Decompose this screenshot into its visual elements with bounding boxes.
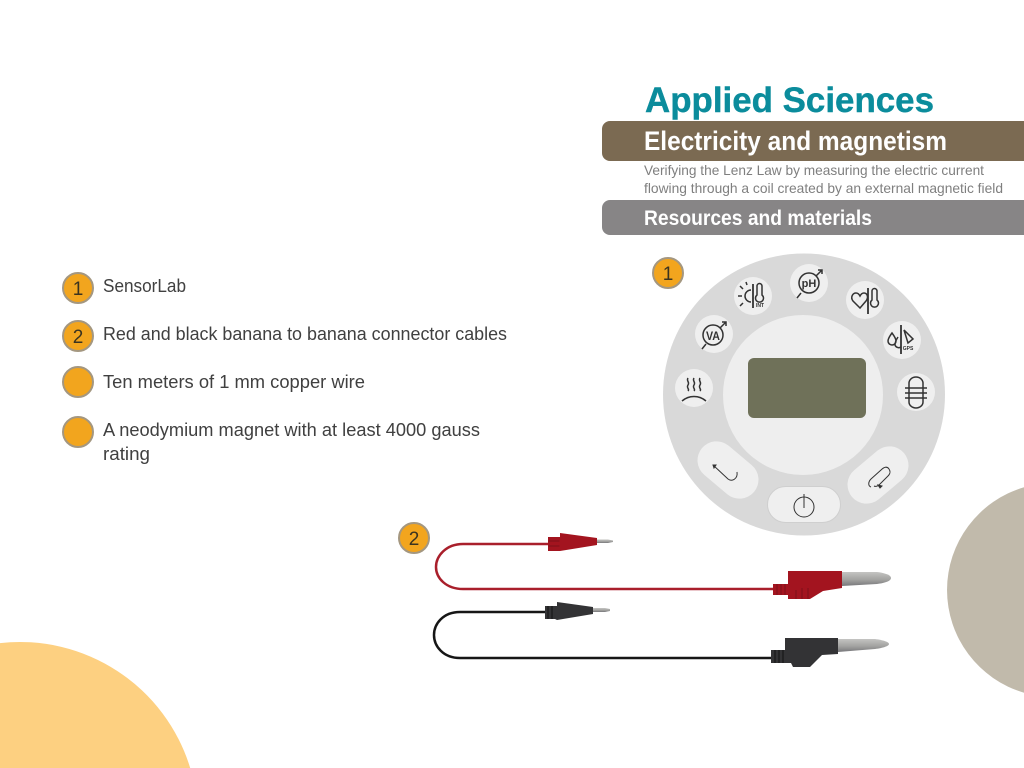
icon: heat [675,369,713,407]
decorative circle: right [947,487,1024,693]
icon: light and temperature [734,277,772,315]
subtitle text: flowing through a coil created by an external magnetic field [644,180,1003,196]
badge: device 1: 1 [663,264,673,285]
list item 2 [63,321,507,351]
black banana cable [434,602,889,667]
list item 4: A neodymium magnet with at least 4000 gauss [103,420,480,440]
small black plug [545,602,610,620]
red wire [436,544,775,589]
subtitle text: Verifying the Lenz Law by measuring the electric current [644,162,984,178]
black wire [434,612,773,658]
badge: cables 2: 2 [409,529,419,550]
banner: Resources and materials: Resources and materials [644,207,872,230]
button: back [690,434,766,506]
logo: Applied Sciences: Applied Sciences [645,81,934,120]
list item 1: SensorLab [103,276,186,296]
banner: Resources and materials [602,200,1024,235]
SensorLab device [663,254,945,536]
decorative circle: bottom left [0,642,190,768]
icon: pH sensor: pH [802,278,816,290]
button: power [768,486,840,522]
banner: Electricity and magnetism [602,121,1024,161]
list: resources [63,273,507,464]
red banana cable [436,533,891,599]
subtitle text [644,162,1003,196]
icon: pH sensor [790,264,828,302]
list item 4 [63,417,480,464]
icon: voltage and current [695,315,733,353]
list item 3 [63,367,365,397]
list item 3: Ten meters of 1 mm copper wire [103,372,365,392]
list item 1: 1 [73,279,83,300]
list item 4: rating [103,444,150,464]
device body [663,254,945,536]
large black plug [771,638,889,667]
small red plug [548,533,613,551]
device screen [748,358,866,418]
badge: cables 2 [399,523,429,553]
list item 2: 2 [73,327,83,348]
icon: humidity and GPS [883,321,921,359]
large red plug [773,571,891,599]
icon: magnetic field [897,373,935,411]
banner: Electricity and magnetism: Electricity and magnetism [644,126,947,156]
badge: device 1 [653,258,683,288]
icon: humidity and GPS: GPS [903,346,914,352]
icon: heart and temperature [846,281,884,319]
list item 1 [63,273,186,303]
device inner face [723,315,883,475]
button: menu [840,439,916,511]
icon: voltage and current: VA [706,329,720,343]
icon: light and temperature: INT [756,303,764,309]
list item 2: Red and black banana to banana connector cables [103,324,507,344]
